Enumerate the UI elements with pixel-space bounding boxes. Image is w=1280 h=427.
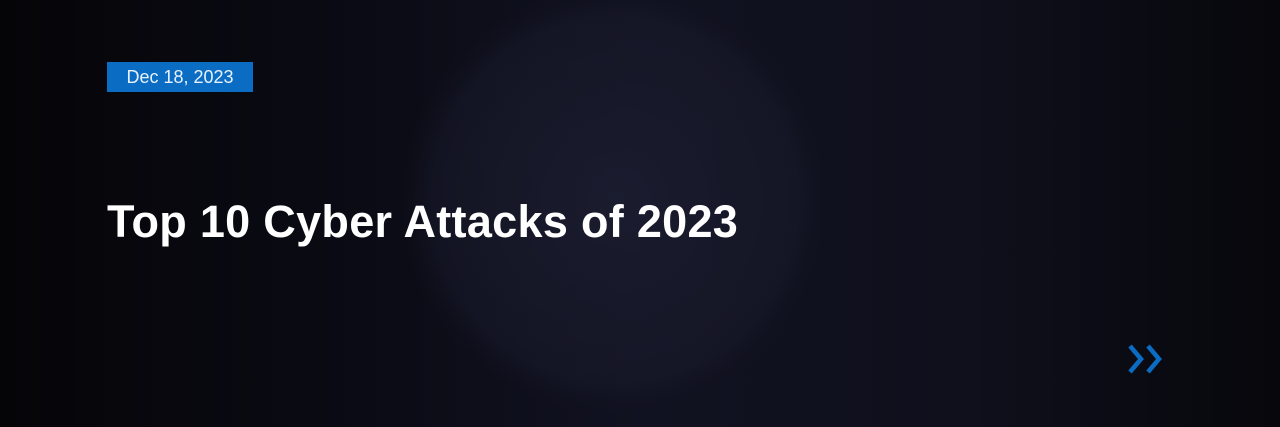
date badge: [107, 62, 253, 92]
title: Top 10 Cyber Attacks of 2023: [107, 196, 738, 247]
date badge: Dec 18, 2023: [126, 67, 234, 87]
icon: double chevron arrow: [1128, 344, 1162, 374]
